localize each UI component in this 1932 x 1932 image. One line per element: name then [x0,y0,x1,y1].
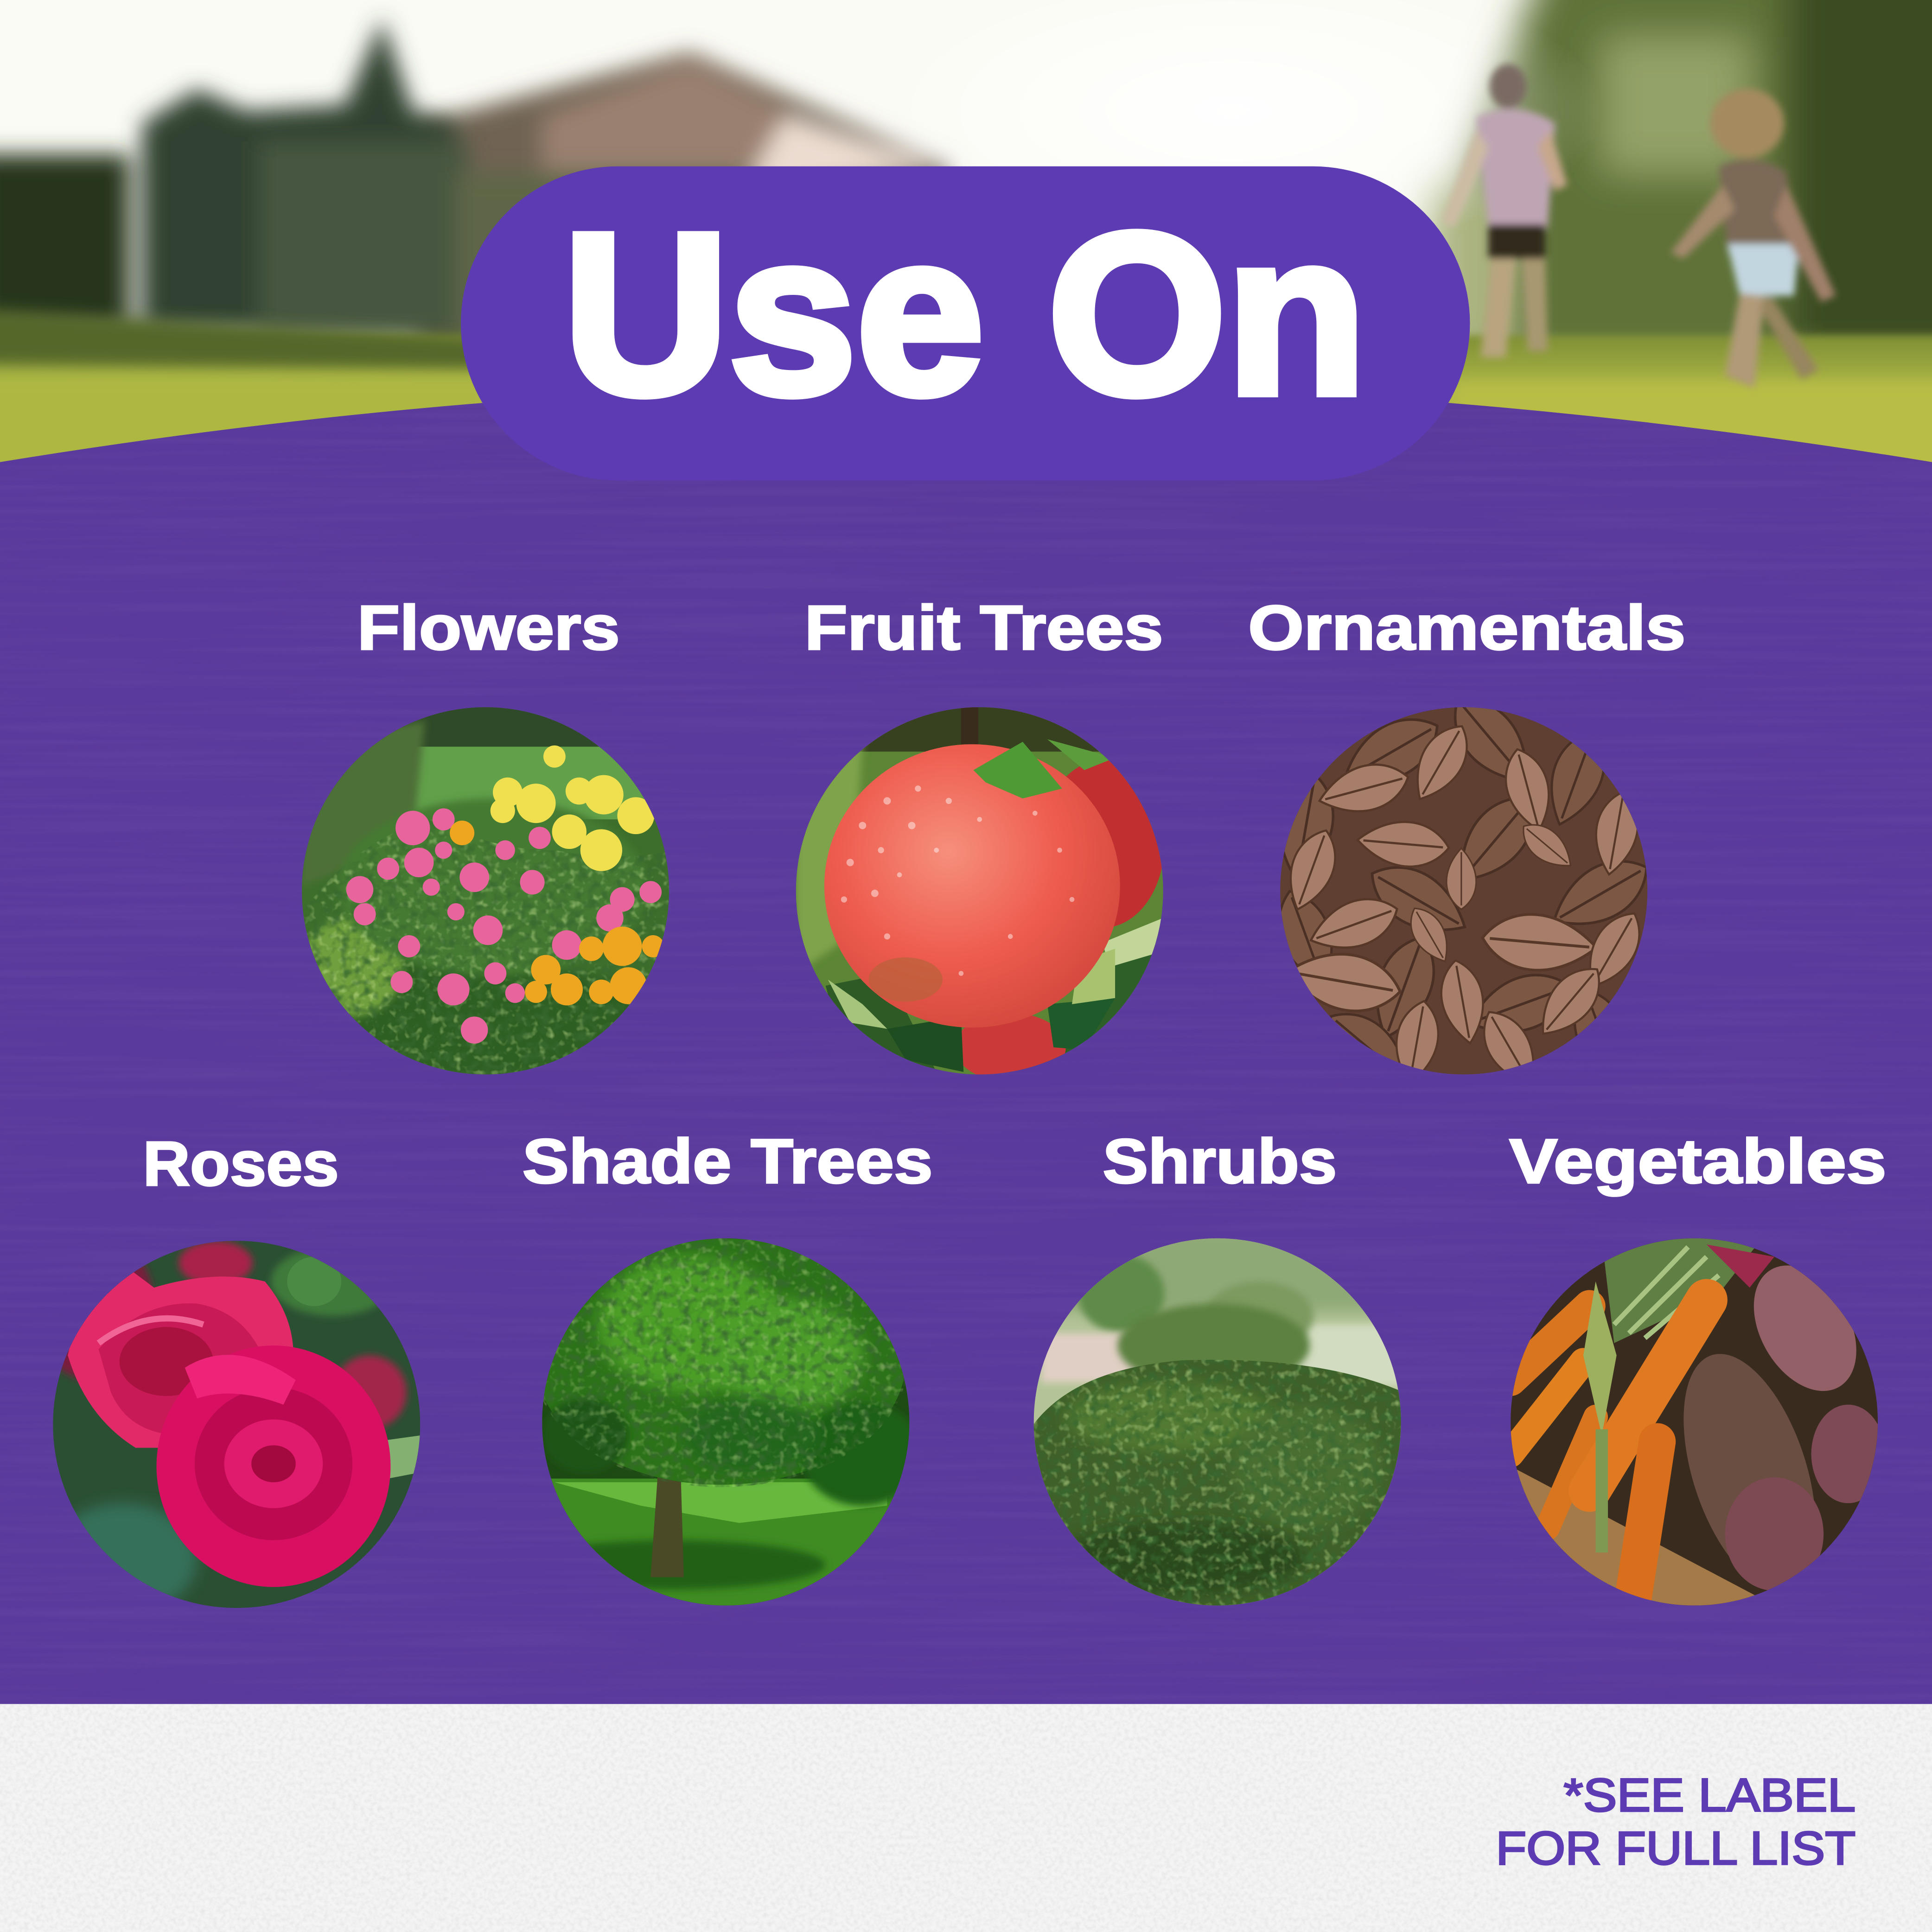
heading: Shrubs: Shrubs [1103,1126,1337,1196]
photo: flowers [300,707,669,1074]
footer plaster strip [0,1704,1932,1932]
child left [1441,64,1567,357]
photo: shade tree [517,1232,924,1606]
front leaves [1278,716,1652,1095]
footnote: FOR FULL LIST [1496,1823,1855,1875]
photo: fruit tree apple [796,707,1164,1082]
heading: Fruit Trees: Fruit Trees [804,593,1163,663]
child right [1671,89,1836,388]
footnote [1496,1770,1855,1875]
title pill [461,166,1470,480]
heading: Roses: Roses [143,1129,339,1199]
trees right [1429,0,1932,370]
purple wood-textured panel [0,370,1932,1704]
house roof [419,52,949,370]
photo: shrubs [1023,1226,1417,1614]
trees left [0,19,752,345]
grass [0,335,1932,483]
back leaves [1267,683,1659,1099]
heading: Ornamentals: Ornamentals [1248,593,1685,663]
title: Use On [563,186,1366,442]
photo: ornamentals foliage [1280,707,1647,1075]
photo: vegetables [1511,1238,1885,1607]
sun glow [862,0,1602,259]
heading: Shade Trees: Shade Trees [523,1126,933,1196]
footnote: *SEE LABEL [1563,1770,1855,1822]
background photo: lawn with house and children [0,0,1932,493]
heading: Flowers: Flowers [357,593,620,663]
heading: Vegetables: Vegetables [1509,1126,1887,1196]
photo: roses [31,1232,420,1614]
